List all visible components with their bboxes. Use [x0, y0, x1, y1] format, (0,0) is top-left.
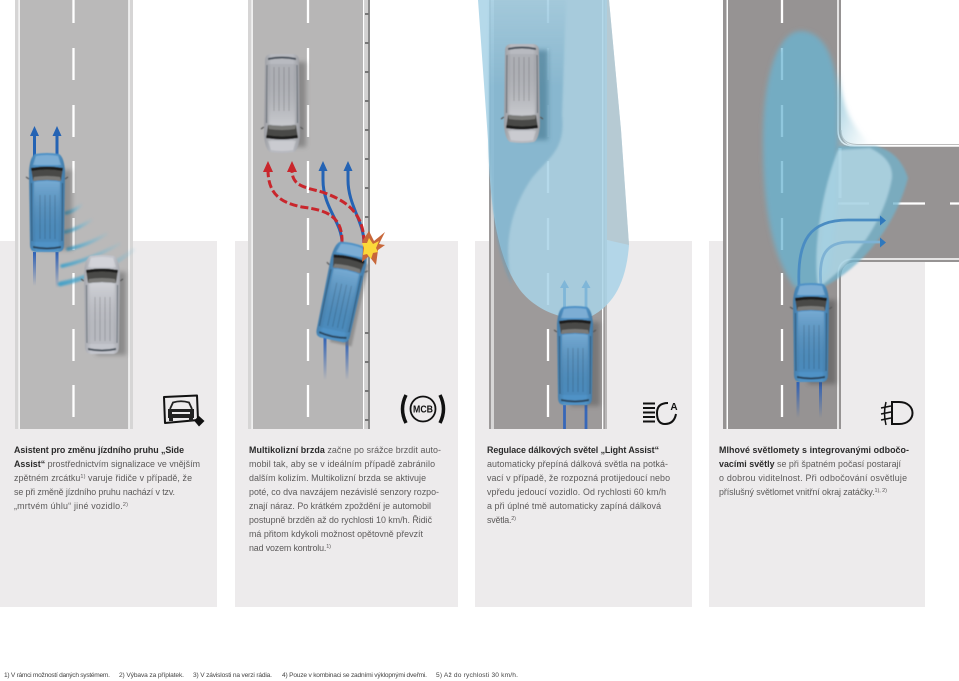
text: fog light [719, 445, 909, 497]
text: multicollision brake: znají náraz. Po krátkém zpoždění je automobil [249, 501, 431, 511]
high beam light cone [478, 0, 629, 316]
text: multicollision brake: Multikolizní brzda začne po srážce brzdit auto- [249, 445, 441, 455]
panel background [235, 241, 458, 607]
text: light assist [487, 445, 670, 525]
text: multicollision brake: postupně brzděn až do rychlosti 10 km/h. Řidič [249, 515, 433, 525]
guardrail [365, 0, 370, 429]
panel background [475, 241, 692, 607]
right fade over verge [607, 0, 629, 245]
text: side assist: Assist“ prostřednictvím signalizace ve vnějším [14, 459, 200, 469]
panel: light assist [475, 0, 692, 607]
gray car [261, 54, 303, 153]
shadow blue car [570, 322, 600, 406]
panel: multicollision brake [235, 0, 458, 607]
text: fog light: o dobrou viditelnost. Při odbočování osvětluje [719, 473, 907, 483]
text: light assist: světla. [487, 515, 511, 525]
darker dipped beam area [489, 0, 566, 285]
text: side assist: se při změně jízdního pruhu nachází v tzv. [14, 487, 175, 497]
panel: fog lights with cornering function [709, 0, 959, 607]
text: side assist: 1) [80, 474, 86, 480]
icon: MCB: MCB [413, 404, 433, 416]
gray car [81, 255, 123, 354]
text: multicollision brake: dalším kolizím. Multikolizní brzda se aktivuje [249, 473, 426, 483]
text: light assist: a při úplné tmě automaticky zapíná dálková [487, 501, 661, 511]
road with side junction [723, 0, 959, 429]
corner glow over verge [838, 70, 872, 148]
gray car [501, 44, 543, 143]
text: light assist: Regulace dálkových světel „Light Assist“ [487, 445, 659, 455]
blue car trajectory arrows [30, 126, 62, 288]
footnotes: 5) Až do rychlosti 30 km/h. [436, 672, 518, 679]
blue car rotated [311, 239, 373, 344]
icon: MCB [402, 395, 444, 423]
footnotes [4, 672, 518, 679]
text: side assist [14, 445, 200, 511]
text: multicollision brake: 1) [326, 544, 331, 550]
text: side assist: 2) [123, 502, 128, 508]
text: fog light: Mlhové světlomety s integrovanými odbočo- [719, 445, 909, 455]
footnotes: 4) Pouze v kombinaci se zadními výklopnými dveřmi. [282, 672, 427, 679]
text: multicollision brake [249, 445, 441, 553]
red dashed path arrows [268, 170, 364, 243]
blue arrowheads [318, 161, 352, 171]
shadow blue car [808, 300, 836, 384]
footnotes: 1) V rámci možností daných systémem. [4, 672, 110, 679]
fog light beam [763, 31, 838, 290]
text: light assist: automaticky přepíná dálková světla na potká- [487, 459, 668, 469]
text: multicollision brake: nad vozem kontrolu. [249, 543, 326, 553]
panel background [709, 241, 925, 607]
shadow gray car [276, 62, 306, 147]
text: multicollision brake: má přitom kdykoli možnost opětovně převzít [249, 529, 424, 539]
text: fog light: příslušný světlomet vnitřní okraj zatáčky. [719, 487, 875, 497]
panel: side assist [0, 0, 217, 607]
text: side assist: zpětném zrcátku [14, 473, 80, 483]
panel background [0, 241, 217, 607]
shadow gray car [518, 50, 548, 140]
icon: light assist: A [670, 402, 678, 413]
blue path arrows [323, 168, 364, 243]
blue car [26, 153, 68, 252]
road [15, 0, 133, 429]
cornering beam outer [818, 146, 908, 290]
text: side assist: „mrtvém úhlu“ jiné vozidlo. [14, 501, 123, 511]
text: side assist: varuje řidiče v případě, že [86, 473, 192, 483]
shadow gray car [96, 272, 126, 355]
shadow blue car [42, 170, 72, 250]
text: light assist: vací v případě, že rozpozná protijedoucí nebo [487, 473, 670, 483]
sensor waves [60, 205, 133, 284]
icon: fog light [881, 402, 912, 425]
text: light assist: 2) [511, 516, 516, 522]
light blue arrows [560, 280, 590, 310]
red arrowheads [263, 161, 297, 172]
road [248, 0, 368, 429]
blue car [554, 306, 596, 405]
text: multicollision brake: poté, co dva navzájem nezávislé senzory rozpo- [249, 487, 439, 497]
text: side assist: Asistent pro změnu jízdního pruhu „Side [14, 445, 184, 455]
collision star [362, 231, 385, 265]
turning arrowheads [880, 216, 886, 248]
icon: light assist [643, 402, 678, 424]
shadow blue car [330, 260, 369, 346]
cornering beam inner [816, 148, 892, 288]
text: fog light: vacími světly se při špatném počasí postarají [719, 459, 902, 469]
turning arrows [799, 220, 882, 285]
text: fog light: 1), 2) [875, 488, 887, 494]
footnotes: 2) Výbava za příplatek. [119, 672, 184, 679]
road [489, 0, 607, 429]
icon: side assist [164, 396, 204, 426]
footnotes: 3) V závislosti na verzi rádia. [193, 672, 272, 679]
tail lines [564, 405, 586, 429]
tail lines [324, 336, 348, 380]
text: multicollision brake: mobil tak, aby se v ideálním případě zabránilo [249, 459, 435, 469]
blue car [790, 283, 832, 382]
tail lines [796, 382, 822, 418]
text: light assist: vpředu jedoucí vozidlo. Od rychlosti 60 km/h [487, 487, 666, 497]
